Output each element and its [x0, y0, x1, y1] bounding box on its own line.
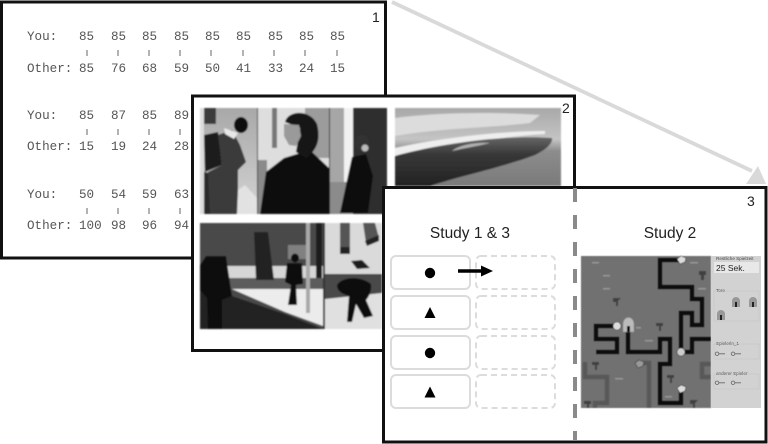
allocation row 3: 96	[142, 219, 157, 233]
allocation row 1	[27, 30, 345, 76]
allocation row 1: 85	[142, 30, 157, 44]
allocation row 3: 50	[79, 188, 94, 202]
game screenshot: maze map	[581, 256, 711, 408]
allocation row 3: Other:	[27, 219, 72, 233]
panel 1: payoff allocation lists	[2, 2, 386, 258]
gates group: Tore	[716, 288, 725, 293]
maze paths of player	[596, 260, 711, 403]
allocation row 1: 85	[268, 30, 283, 44]
allocation row 2: Other:	[27, 140, 72, 154]
faint grass marks on the map	[592, 262, 706, 398]
allocation row 1: 76	[111, 62, 126, 76]
allocation row 2: 85	[142, 109, 157, 123]
sequence task: solid cue boxes	[391, 256, 470, 408]
icons: circle and triangle cues	[424, 268, 436, 398]
panel 2: photo stimuli	[192, 96, 574, 350]
gates group	[714, 288, 759, 321]
allocation row 1: 85	[79, 62, 94, 76]
allocation row 1: 85	[205, 30, 220, 44]
gems at path ends	[635, 256, 686, 393]
allocation row 1: 24	[299, 62, 314, 76]
allocation row 3: 98	[111, 219, 126, 233]
allocation row 2: 87	[111, 109, 126, 123]
allocation row 1: 68	[142, 62, 157, 76]
photo: whale underwater	[395, 108, 561, 186]
allocation row 2: 89	[174, 109, 189, 123]
panel number 3: 3	[747, 193, 755, 209]
photo: man with backpack, woman with headphones, woman from behind	[200, 108, 387, 214]
player 1 keys	[714, 341, 759, 359]
allocation row 1: 50	[205, 62, 220, 76]
allocation row 2: 24	[142, 140, 157, 154]
allocation row 2	[27, 109, 189, 154]
allocation row 1: 59	[174, 62, 189, 76]
heading: Study 1 & 3: Study 1 & 3	[430, 225, 510, 242]
panel number 2: 2	[562, 100, 570, 116]
game screenshot: sidebar: 25 Sek.	[716, 263, 745, 273]
maze paths of other player	[585, 362, 711, 408]
allocation row 3: You:	[27, 188, 57, 202]
allocation row 3: 59	[142, 188, 157, 202]
allocation row 1: 41	[236, 62, 251, 76]
trees on the map	[584, 271, 706, 408]
allocation row 1: 85	[174, 30, 189, 44]
allocation row 1: 85	[236, 30, 251, 44]
allocation row 2: 28	[174, 140, 189, 154]
player 1 keys: Spielerin_1	[716, 341, 739, 346]
other player keys: anderer Spieler	[716, 371, 748, 376]
allocation row 1: 85	[79, 30, 94, 44]
allocation row 1: Other:	[27, 62, 72, 76]
allocation row 3: 94	[174, 219, 189, 233]
allocation row 3: 63	[174, 188, 189, 202]
heading: Study 2: Study 2	[644, 225, 696, 242]
allocation row 1: 33	[268, 62, 283, 76]
allocation row 2: 19	[111, 140, 126, 154]
panel 3: task displays	[384, 188, 766, 442]
player tokens and door	[613, 317, 685, 356]
allocation row 2: 85	[79, 109, 94, 123]
game screenshot: sidebar	[711, 256, 761, 408]
allocation row 1: 85	[111, 30, 126, 44]
panel number 1: 1	[372, 9, 380, 25]
allocation row 3	[27, 188, 189, 233]
allocation row 1: You:	[27, 30, 57, 44]
allocation row 2: 15	[79, 140, 94, 154]
allocation row 3: 54	[111, 188, 126, 202]
allocation row 1: 85	[299, 30, 314, 44]
allocation row 2: You:	[27, 109, 57, 123]
allocation row 3: 100	[79, 219, 102, 233]
arrow: black response arrow	[458, 266, 493, 276]
other player keys	[714, 371, 759, 389]
arrow: grey progression arrow from panel 1 to panel 3	[392, 2, 766, 184]
divider: dashed line between studies	[573, 188, 577, 441]
sequence task: dashed target boxes	[476, 256, 555, 408]
remaining time readout: Restliche Spielzeit	[716, 256, 754, 261]
allocation row 1: 85	[330, 30, 345, 44]
allocation row 1: 15	[330, 62, 345, 76]
photo: people in snowy park	[200, 223, 382, 329]
